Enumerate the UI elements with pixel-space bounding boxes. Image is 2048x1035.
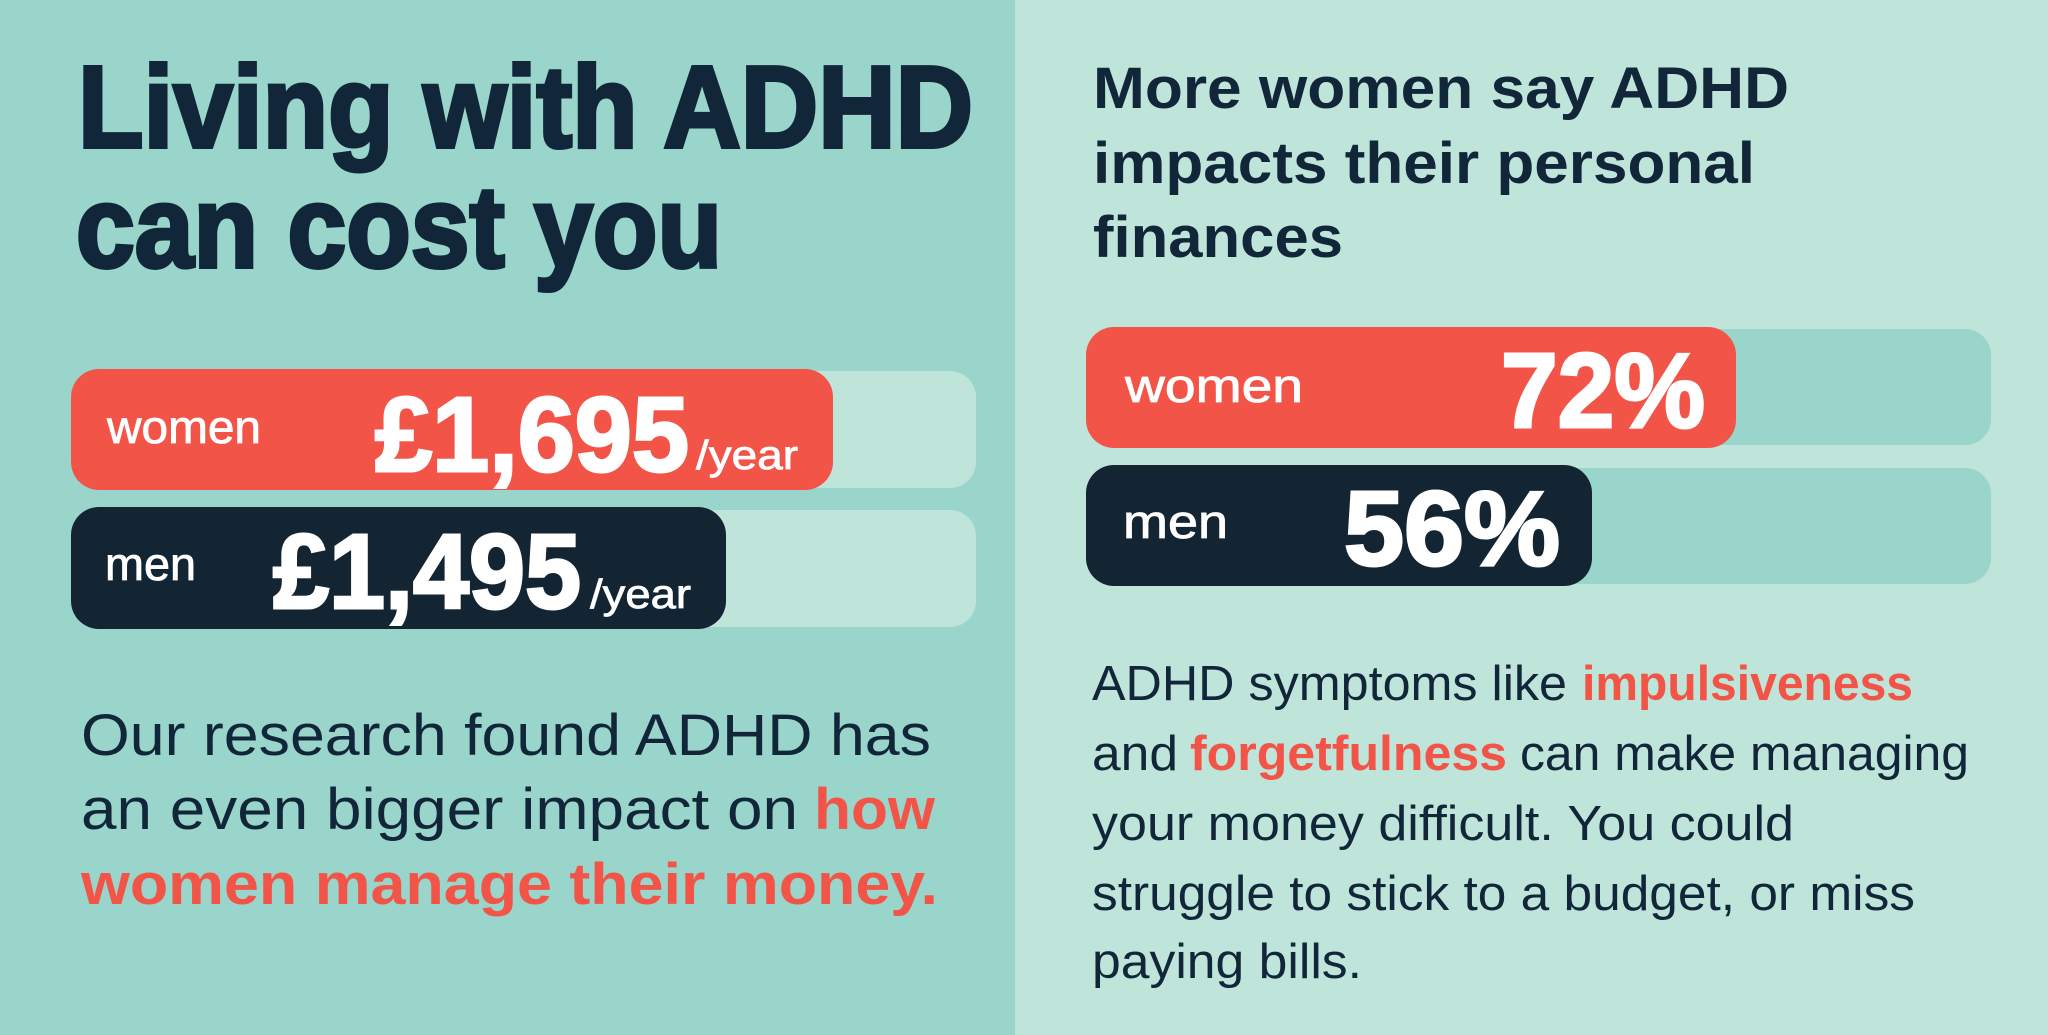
panel: right background — [1015, 0, 2048, 1035]
text block: left body: how — [814, 777, 936, 842]
title: Living with ADHD — [78, 42, 973, 172]
women bar: /year — [696, 432, 798, 478]
women track — [1086, 329, 1991, 445]
women bar: 72% — [1501, 332, 1705, 450]
men track — [71, 510, 976, 627]
men bar — [71, 507, 726, 631]
women bar — [71, 369, 833, 494]
text block: right body: ADHD symptoms like — [1092, 657, 1567, 711]
text block: right body: can make managing — [1520, 727, 1969, 781]
women track — [71, 371, 976, 488]
heading: impacts their personal — [1093, 131, 1755, 196]
men bar: £1,495 — [273, 513, 581, 631]
women bar — [1086, 327, 1736, 450]
title: can cost you — [76, 162, 722, 292]
women bar: women — [1124, 359, 1303, 412]
text block: right body: your money difficult. You could — [1092, 797, 1794, 851]
text block: right body: and — [1092, 727, 1178, 781]
men bar — [1086, 465, 1592, 588]
text block: left body: women manage their money. — [80, 852, 938, 917]
bar chart: impact on personal finances — [1086, 327, 1991, 588]
heading: finances — [1093, 205, 1343, 270]
text block: left body: Our research found ADHD has — [81, 703, 931, 768]
text block: right body: struggle to stick to a budget, or miss — [1092, 867, 1915, 921]
text block: left body — [80, 703, 938, 917]
text block: right body: impulsiveness — [1582, 657, 1913, 711]
panel: left background — [0, 0, 1015, 1035]
men bar: men — [1123, 495, 1228, 548]
men bar: men — [105, 538, 196, 590]
bar chart: annual cost by gender — [71, 369, 976, 631]
title — [76, 42, 973, 292]
heading — [1093, 56, 1789, 270]
women bar: £1,695 — [375, 376, 689, 494]
men track — [1086, 468, 1991, 584]
text block: right body: paying bills. — [1092, 935, 1362, 989]
men bar: /year — [590, 571, 691, 617]
heading: More women say ADHD — [1093, 56, 1789, 121]
text block: left body: an even bigger impact on — [81, 777, 798, 842]
text block: right body: forgetfulness — [1190, 727, 1507, 781]
text block: right body — [1092, 657, 1969, 989]
men bar: 56% — [1344, 470, 1560, 588]
women bar: women — [106, 401, 261, 453]
